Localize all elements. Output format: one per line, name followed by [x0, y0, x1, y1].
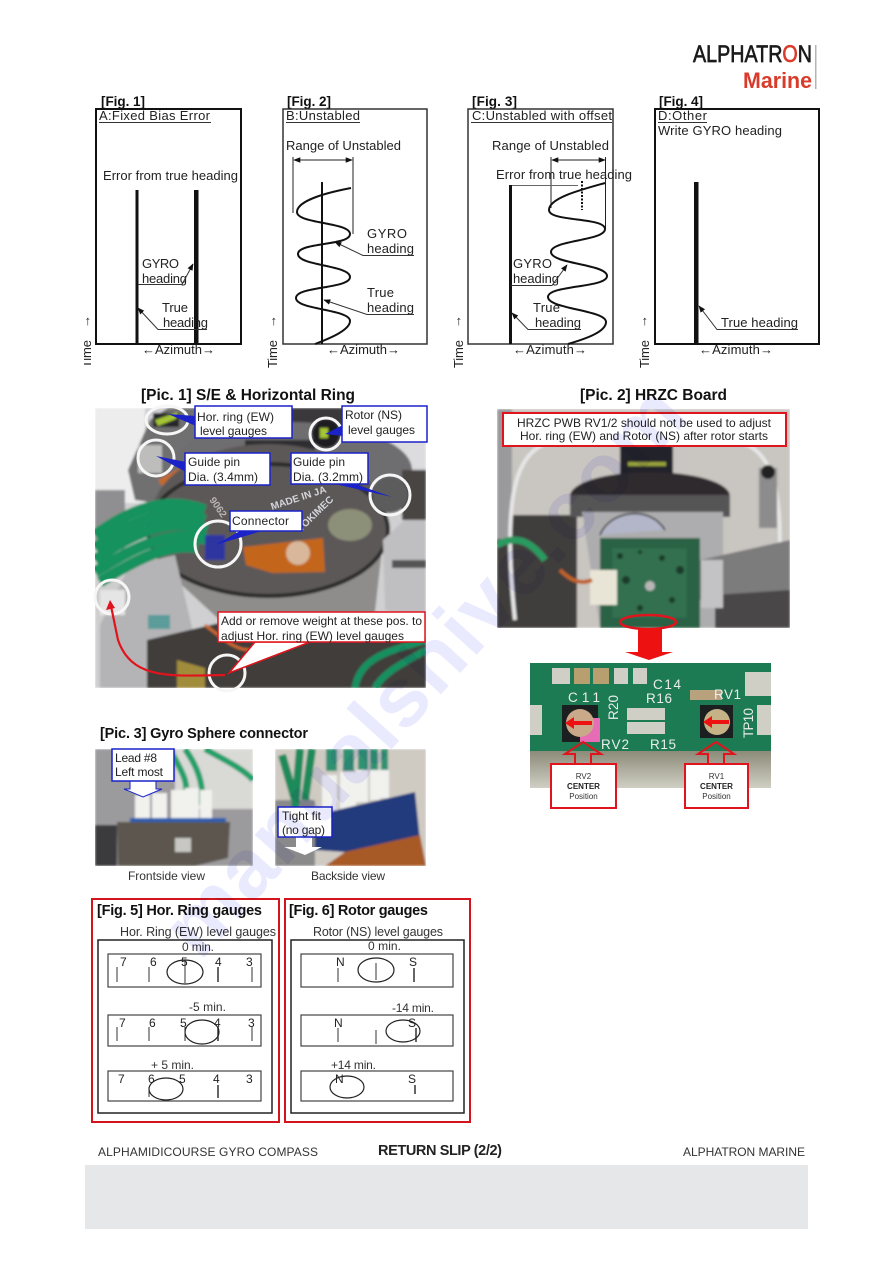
gauge: 0 min: 7 — [120, 955, 127, 969]
watermark: manualshive.com — [144, 367, 703, 974]
fig 3 subtitle: C:Unstabled with offset — [472, 108, 612, 123]
callout: Hor. ring level gauges — [168, 406, 292, 438]
footer grey band — [85, 1165, 808, 1229]
callout: lead #8 left most: Lead #8 — [115, 751, 157, 765]
pic 2 close-up photo of trimmers: C14 — [653, 677, 681, 692]
fig 5 red frame — [92, 899, 279, 1122]
callout: Hor. ring level gauges: level gauges — [200, 424, 267, 438]
fig 2 heading: [Fig. 2] — [287, 94, 331, 109]
callout: RV2 center position: CENTER — [567, 782, 600, 791]
fig 3 gyro label: heading — [513, 271, 559, 286]
fig 3 heading: [Fig. 3] — [472, 94, 517, 109]
pic 3 heading: [Pic. 3] Gyro Sphere connector — [100, 726, 308, 742]
fig 3 azimuth axis label: ←Azimuth→ — [513, 342, 587, 357]
figure 3: unstabled with offset — [449, 94, 632, 368]
panel: Pic 2 HRZC board — [497, 387, 790, 808]
fig 1 time axis label: Time — [79, 340, 94, 368]
fig 2 range label: Range of Unstabled — [286, 138, 401, 153]
fig 2 true heading line — [321, 182, 323, 344]
fig 3 chart box — [468, 109, 613, 344]
fig 2 gyro label: heading — [367, 241, 414, 256]
callout: RV1 center position — [685, 742, 748, 808]
red ellipse marking the trimmer area — [620, 615, 676, 629]
fig 6 red frame — [285, 899, 470, 1122]
pic 2 board photo — [497, 409, 790, 628]
callout: Guide pin 3.4mm: Guide pin — [188, 455, 240, 469]
gauge: 0 min: 5 — [181, 955, 188, 969]
callout: Guide pin 3.2mm: Dia. (3.2mm) — [293, 470, 363, 484]
fig 4 time axis label: Time — [637, 340, 652, 368]
fig 2 gyro curve — [296, 188, 351, 344]
fig 1 gyro label: GYRO — [142, 256, 179, 271]
gauge: -5 min: 4 — [214, 1016, 221, 1030]
gauge: 0 min — [301, 939, 453, 987]
fig 2 time axis label — [264, 315, 280, 368]
gauge: 0 min: 0 min. — [182, 940, 214, 954]
gauge: -5 min — [108, 1000, 261, 1046]
pic 1 photo: MADE IN JA — [270, 485, 328, 513]
callout: Hor. ring level gauges: Hor. ring (EW) — [197, 410, 274, 424]
fig 4 true label: True heading — [721, 315, 798, 330]
fig 3 true label — [512, 300, 581, 330]
fig 3 gyro label: GYRO — [513, 256, 552, 271]
fig 5 subtitle: Hor. Ring (EW) level gauges — [120, 925, 276, 939]
fig 2 range arrow — [293, 157, 353, 234]
fig 4 chart box — [655, 109, 819, 344]
gauge: 0 min: S — [409, 955, 417, 969]
fig 3 range label: Range of Unstabled — [492, 138, 609, 153]
panel: Pic 1 S/E and horizontal ring — [95, 387, 427, 691]
fig 4 true heading line — [694, 182, 698, 344]
footer text: company name: ALPHATRON MARINE — [683, 1145, 805, 1159]
callout: Rotor level gauges — [325, 406, 427, 442]
fig 5 heading: [Fig. 5] Hor. Ring gauges — [97, 903, 262, 919]
callout: add or remove weight — [218, 612, 425, 673]
fig 1 gyro label — [138, 256, 193, 286]
gauge: -5 min: 6 — [149, 1016, 156, 1030]
fig 2 true label — [324, 285, 414, 315]
gauge: +5 min: 3 — [246, 1072, 253, 1086]
fig 2 true label: True — [367, 285, 394, 300]
fig 2 time axis label: Time — [265, 340, 280, 368]
fig 2 gyro label — [335, 226, 414, 256]
pic 2 close-up photo of trimmers — [530, 663, 771, 788]
gauge: 0 min — [108, 940, 261, 987]
gauge: -5 min: -5 min. — [189, 1000, 226, 1014]
fig 6 heading: [Fig. 6] Rotor gauges — [289, 903, 428, 919]
gauge: +5 min: 7 — [118, 1072, 125, 1086]
callout: RV2 center position: RV2 — [576, 772, 592, 781]
callout: lead #8 left most: Left most — [115, 765, 164, 779]
callout: tight fit no gap: Tight fit — [282, 809, 322, 823]
figure 1: fixed bias error — [78, 94, 241, 368]
callout: RV2 center position — [551, 742, 616, 808]
fig 1 error label: Error from true heading — [103, 168, 238, 183]
callout: RV1 center position: CENTER — [700, 782, 733, 791]
fig 1 azimuth axis label: ←Azimuth→ — [142, 342, 215, 357]
fig 1 subtitle: A:Fixed Bias Error — [99, 108, 211, 123]
pic 2 close-up photo of trimmers: C11 — [568, 690, 600, 705]
gauge: +5 min: + 5 min. — [151, 1058, 194, 1072]
gauge: +14 min: S — [408, 1072, 416, 1086]
fig 1 gyro label: heading — [142, 271, 187, 286]
fig 3 range arrow — [551, 157, 606, 229]
gauge: +14 min — [301, 1058, 453, 1101]
fig 6 inner frame — [291, 940, 464, 1113]
gauge: +5 min — [108, 1058, 261, 1101]
callout: add or remove weight: adjust Hor. ring (EW) level gauges — [221, 629, 404, 643]
callout: Rotor level gauges: Rotor (NS) — [345, 408, 402, 422]
pic 1 photo — [95, 408, 426, 688]
fig 2 gyro label: GYRO — [367, 226, 407, 241]
caption: backside view: Backside view — [311, 869, 385, 883]
logo: Alphatron Marine: ALPHATRON — [693, 41, 812, 68]
fig 5 inner frame — [98, 940, 272, 1113]
callout: Guide pin 3.4mm: Dia. (3.4mm) — [188, 470, 258, 484]
footer text: course name: ALPHAMIDICOURSE GYRO COMPASS — [98, 1145, 318, 1159]
callout: Guide pin 3.4mm — [156, 453, 270, 485]
gauge: +14 min: +14 min. — [331, 1058, 376, 1072]
callout: Rotor level gauges: level gauges — [348, 423, 415, 437]
gauge: +14 min: N — [335, 1072, 344, 1086]
gauge: 0 min: 4 — [215, 955, 222, 969]
fig 2 azimuth axis label: ←Azimuth→ — [327, 342, 400, 357]
gauge: -5 min: 7 — [119, 1016, 126, 1030]
fig 4 azimuth axis label: ←Azimuth→ — [699, 342, 773, 357]
pic 2 close-up photo of trimmers: RV1 — [714, 687, 741, 702]
fig 1 time axis label: → — [78, 315, 93, 328]
caption: frontside view: Frontside view — [128, 869, 205, 883]
panel: Pic 3 gyro sphere connector — [95, 726, 426, 883]
callout: RV1 center position: RV1 — [709, 772, 725, 781]
logo: Alphatron Marine: Marine — [743, 68, 812, 93]
gauge: 0 min: N — [336, 955, 345, 969]
fig 4 time axis label — [635, 315, 652, 368]
gauge: -14 min: -14 min. — [392, 1001, 434, 1015]
gauge: +5 min: 6 — [148, 1072, 155, 1086]
pic 1 heading: [Pic. 1] S/E & Horizontal Ring — [141, 387, 355, 404]
fig 3 true label: heading — [535, 315, 581, 330]
callout: Guide pin 3.2mm — [291, 453, 392, 497]
gauge: -14 min: N — [334, 1016, 343, 1030]
callout: RV2 center position: Position — [569, 792, 598, 801]
fig 3 time axis label — [449, 315, 466, 368]
gauge: 0 min: 0 min. — [368, 939, 401, 953]
fig 1 heading: [Fig. 1] — [101, 94, 145, 109]
pic 2 warning callout — [503, 413, 786, 446]
fig 1 true label: heading — [163, 315, 208, 330]
pic 2 close-up photo of trimmers: TP10 — [741, 708, 756, 738]
gauge: +5 min: 4 — [213, 1072, 220, 1086]
fig 4 time axis label: → — [635, 315, 650, 328]
fig 3 error label: Error from true heading — [496, 167, 632, 182]
fig 4 true label — [699, 306, 798, 330]
fig 3 gyro curve — [548, 183, 607, 344]
fig 4 instruction text: Write GYRO heading — [658, 123, 782, 138]
fig 3 time axis label: → — [449, 315, 464, 328]
callout: Guide pin 3.2mm: Guide pin — [293, 455, 345, 469]
fig 2 chart box — [283, 109, 427, 344]
fig 2 true label: heading — [367, 300, 414, 315]
gauge: 0 min: 6 — [150, 955, 157, 969]
fig 2 time axis label: → — [264, 315, 279, 328]
arrow: red curve between weight positions — [106, 600, 225, 676]
callout: tight fit no gap: (no gap) — [282, 823, 325, 837]
callout: RV1 center position: Position — [702, 792, 731, 801]
fig 1 true heading line — [136, 190, 138, 344]
panel: Fig 6 rotor gauges — [285, 899, 470, 1122]
callout: Connector — [215, 511, 302, 545]
gauge: -14 min: S — [408, 1016, 416, 1030]
pic 2 close-up photo of trimmers: R16 — [646, 691, 672, 706]
pic 2 close-up photo of trimmers: R20 — [606, 695, 621, 720]
fig 3 true heading line — [509, 185, 512, 344]
fig 1 gyro heading line — [194, 190, 198, 344]
pic 3 frontside photo — [95, 749, 253, 866]
fig 4 subtitle: D:Other — [658, 108, 708, 123]
footer text: return slip title: RETURN SLIP (2/2) — [378, 1143, 502, 1159]
fig 2 subtitle: B:Unstabled — [286, 108, 360, 123]
pic 2 warning callout: HRZC PWB RV1/2 should not be used to adjust — [517, 416, 772, 430]
callout: lead #8 left most — [112, 749, 174, 797]
figure 2: unstabled — [264, 94, 427, 368]
pic 2 close-up photo of trimmers: RV2 — [601, 737, 629, 752]
pic 1 photo: TOKIMEC — [295, 494, 336, 534]
fig 4 heading: [Fig. 4] — [659, 94, 703, 109]
figure 4: other — [635, 94, 819, 368]
pic 1 photo: 9062 — [207, 495, 229, 520]
pic 2 close-up photo of trimmers: R15 — [650, 737, 676, 752]
fig 3 time axis label: Time — [451, 340, 466, 368]
gauge: +5 min: 5 — [179, 1072, 186, 1086]
fig 6 subtitle: Rotor (NS) level gauges — [313, 925, 443, 939]
fig 3 true label: True — [533, 300, 560, 315]
fig 3 gyro label — [511, 256, 567, 286]
callout: tight fit no gap — [278, 807, 332, 855]
gauge: 0 min: 3 — [246, 955, 253, 969]
callout: add or remove weight: Add or remove weight at these pos. to — [221, 614, 422, 628]
logo: Alphatron Marine — [693, 41, 816, 93]
pic 1 white highlight circles — [95, 406, 410, 691]
panel: Fig 5 Hor. ring gauges — [92, 899, 279, 1122]
pic 2 warning callout: Hor. ring (EW) and Rotor (NS) after rotor starts — [520, 429, 768, 443]
fig 1 time axis label — [84, 318, 91, 365]
fig 1 true label — [138, 300, 208, 330]
gauge: -14 min — [301, 1001, 453, 1046]
arrow: red down arrow to close-up — [625, 628, 673, 660]
fig 1 true label: True — [162, 300, 188, 315]
callout: Connector: Connector — [232, 514, 289, 528]
fig 3 error arrow and dotted mean line — [512, 181, 582, 210]
gauge: -5 min: 5 — [180, 1016, 187, 1030]
gauge: -5 min: 3 — [248, 1016, 255, 1030]
fig 1 chart box — [96, 109, 241, 344]
pic 2 heading: [Pic. 2] HRZC Board — [580, 387, 727, 404]
pic 3 backside photo — [275, 749, 426, 866]
